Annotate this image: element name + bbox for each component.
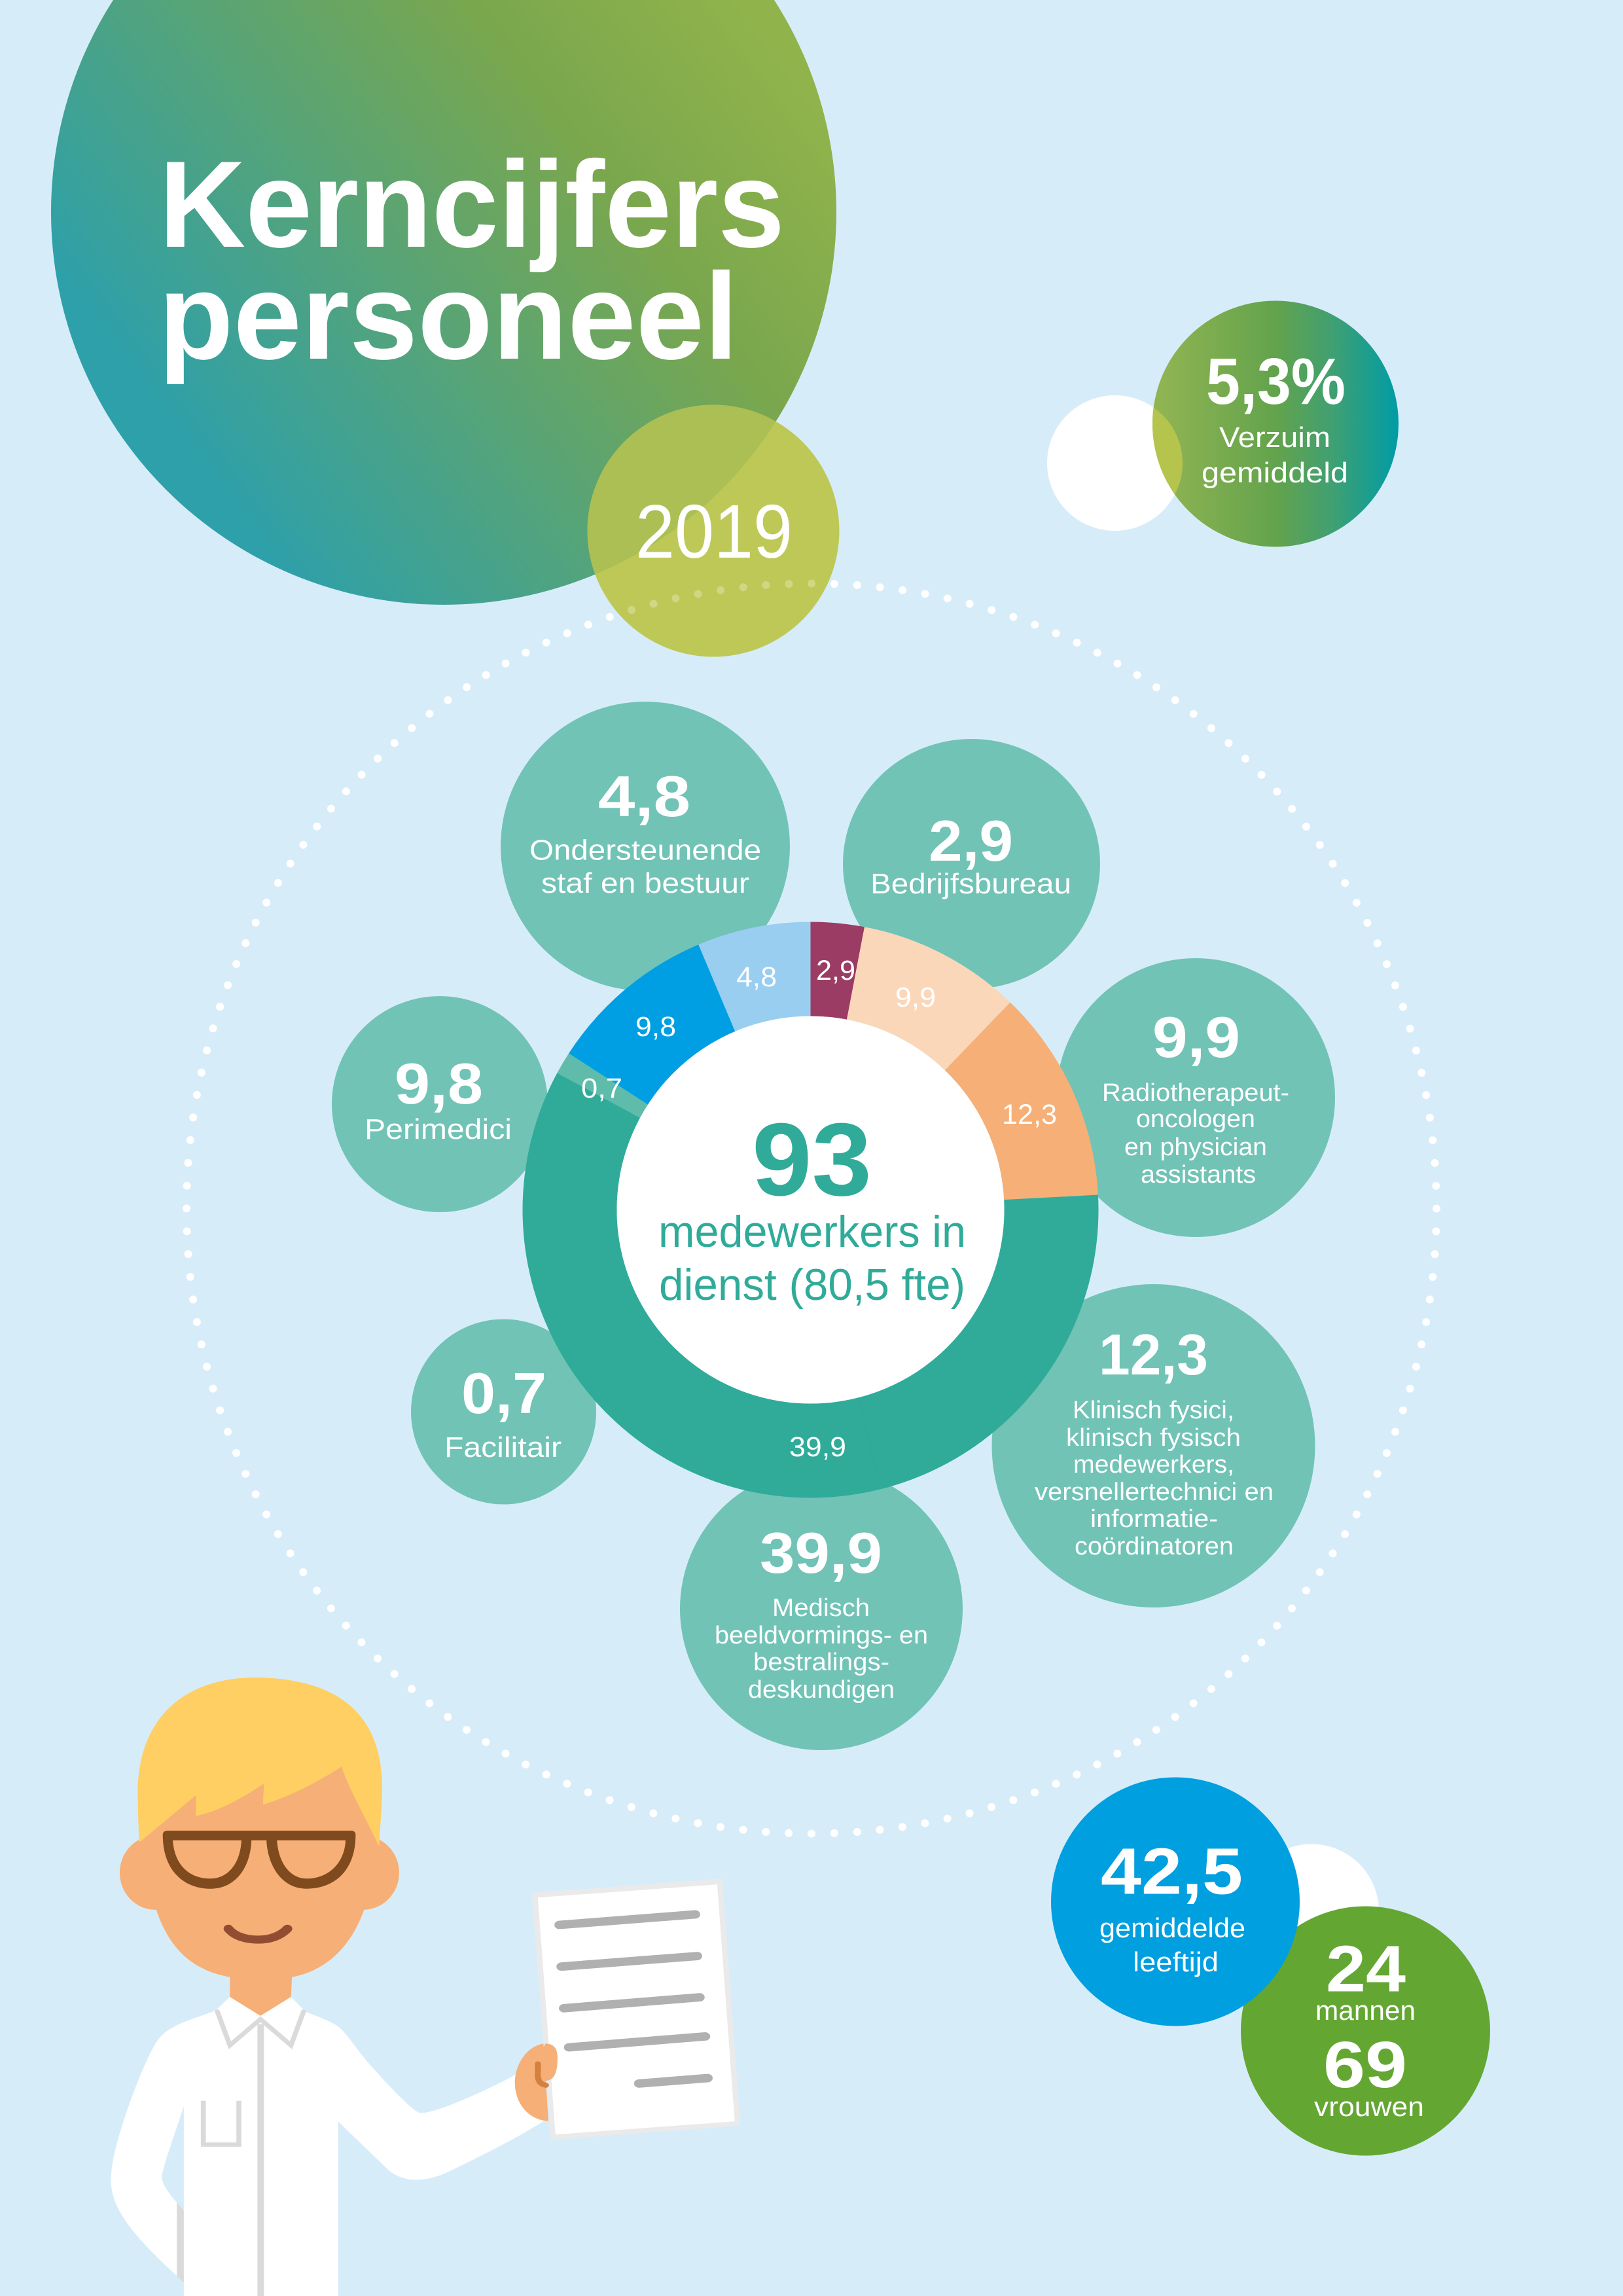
donut chart: 2,9 [816,955,855,986]
panel: perimedici: Perimedici [365,1113,512,1145]
panel: facilitair: Facilitair [444,1431,562,1463]
panel: gemiddelde leeftijd [1051,1778,1300,2026]
icon: coat [111,1997,548,2296]
panel: perimedici [332,996,548,1212]
donut chart: 4,8 [736,961,777,993]
donut centre total: medewerkers in [658,1207,966,1257]
panel: klinisch fysici: coördinatoren [1075,1533,1234,1560]
panel: bedrijfsbureau: Bedrijfsbureau [870,868,1071,900]
icon: document [532,1878,740,2140]
panel: facilitair: 0,7 [461,1361,546,1426]
panel: radiotherapeut-oncologen [1056,958,1335,1237]
panel: ondersteunende staf en bestuur [501,702,790,991]
white accent circle behind age [1244,1844,1379,1979]
icon: head [120,1677,399,2016]
year circle: 2019 [635,489,793,574]
illustration: doctor holding a document [111,1677,740,2296]
panel: ondersteunende staf en bestuur: staf en bestuur [541,867,749,899]
panel: mannen en vrouwen [1241,1906,1490,2156]
donut chart: 39,9 [789,1431,846,1463]
verzuim callout: 5,3% [1206,345,1346,418]
panel: klinisch fysici: medewerkers, [1073,1451,1234,1479]
panel: medisch beeldvormings- en bestralingsdeskundigen [680,1467,963,1750]
donut chart [523,922,1099,1498]
panel: mannen en vrouwen: 24 [1326,1932,1406,2005]
donut centre total [616,1016,1004,1403]
verzuim callout: Verzuim [1219,422,1330,454]
panel: gemiddelde leeftijd: 42,5 [1101,1835,1243,1909]
panel: klinisch fysici [992,1284,1315,1607]
panel: radiotherapeut-oncologen: 9,9 [1152,1005,1240,1069]
title circle [51,0,836,605]
panel: medisch beeldvormings- en bestralingsdeskundigen: deskundigen [748,1676,895,1704]
donut centre total: 93 [752,1102,872,1217]
panel: klinisch fysici: 12,3 [1099,1322,1208,1387]
panel: bedrijfsbureau [843,739,1100,989]
panel: klinisch fysici: klinisch fysisch [1066,1424,1241,1452]
panel: klinisch fysici: informatie- [1090,1505,1218,1533]
panel: radiotherapeut-oncologen: assistants [1141,1161,1256,1189]
panel: medisch beeldvormings- en bestralingsdeskundigen: bestralings- [753,1649,889,1676]
donut chart: 9,8 [635,1011,676,1043]
panel: gemiddelde leeftijd: gemiddelde [1099,1912,1245,1943]
donut chart: 9,9 [895,982,936,1013]
panel: mannen en vrouwen: mannen [1315,1995,1416,2026]
panel: ondersteunende staf en bestuur: Ondersteunende [529,834,761,867]
donut centre total: dienst (80,5 fte) [659,1260,965,1310]
title: Kerncijfers [159,135,785,273]
year circle [588,404,839,657]
verzuim callout: gemiddeld [1202,457,1348,489]
panel: ondersteunende staf en bestuur: 4,8 [598,764,690,829]
panel: mannen en vrouwen: 69 [1323,2028,1407,2102]
panel: radiotherapeut-oncologen: Radiotherapeut- [1102,1079,1289,1107]
title: personeel [158,247,738,385]
donut chart: 12,3 [1002,1099,1057,1130]
title [158,135,785,385]
panel: medisch beeldvormings- en bestralingsdeskundigen: Medisch [772,1594,870,1622]
panel: radiotherapeut-oncologen: oncologen [1136,1105,1255,1133]
panel: mannen en vrouwen: vrouwen [1314,2091,1424,2122]
icon: thumb [538,2043,558,2085]
panel: bedrijfsbureau: 2,9 [929,808,1013,873]
donut chart: 0,7 [581,1073,622,1104]
verzuim callout [1047,301,1399,547]
panel: medisch beeldvormings- en bestralingsdeskundigen: 39,9 [760,1520,882,1585]
panel: facilitair [411,1319,596,1504]
icon: hand [515,2043,548,2121]
panel: medisch beeldvormings- en bestralingsdeskundigen: beeldvormings- en [715,1622,928,1649]
panel: gemiddelde leeftijd: leeftijd [1133,1946,1219,1977]
dotted ring [187,584,1436,1834]
panel: klinisch fysici: versnellertechnici en [1035,1479,1274,1506]
panel: klinisch fysici: Klinisch fysici, [1073,1397,1234,1424]
panel: radiotherapeut-oncologen: en physician [1124,1134,1267,1161]
panel: perimedici: 9,8 [395,1051,483,1116]
